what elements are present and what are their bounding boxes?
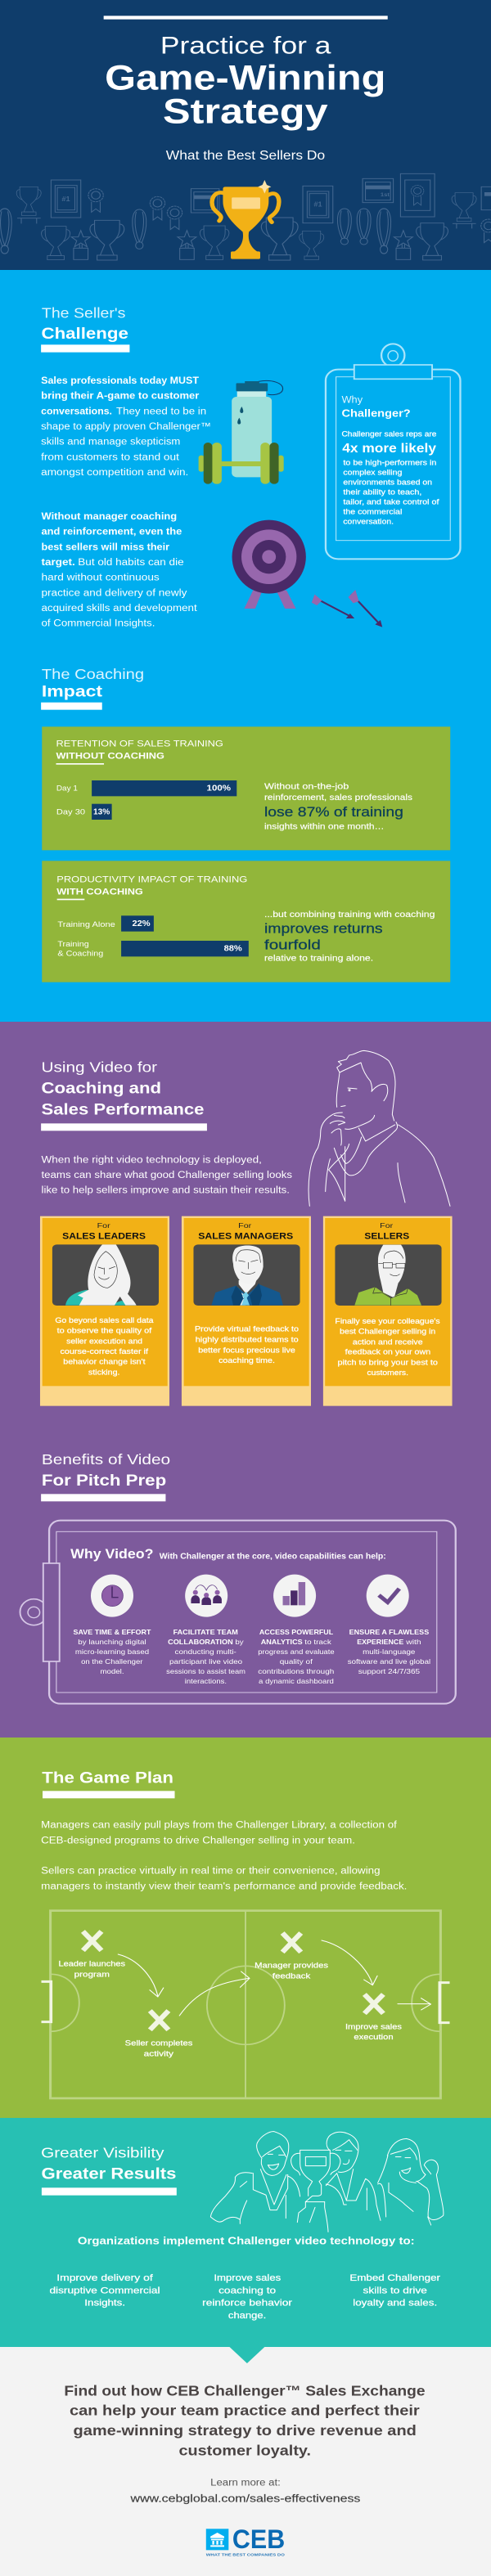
text block: missing the target paragraph: acquired skills and development	[42, 602, 197, 614]
icon: CEB logo: WHAT THE BEST COMPANIES DO	[206, 2553, 285, 2558]
panel: why challenger clipboard: conversation.	[343, 518, 394, 526]
benefit: facilitate team collaboration: participant live video	[169, 1658, 242, 1666]
step: manager provides feedback: Manager provides	[255, 1962, 328, 1970]
title block: Game-Winning	[105, 57, 385, 97]
text block: game plan description: Managers can easily pull plays from the Challenger Library, a collection of	[41, 1819, 397, 1830]
icon: portrait of seller	[354, 1245, 421, 1306]
bar chart: retention: Day 30	[56, 808, 86, 816]
panel: productivity with coaching: WITH COACHING	[56, 886, 143, 897]
step: leader launches program	[59, 1931, 125, 1979]
bar chart: productivity: Training	[57, 941, 89, 949]
panel: retention without coaching	[42, 726, 450, 850]
text block: A-game paragraph: skills and manage skepticism	[41, 436, 180, 447]
heading: Using Video for Coaching and Sales Performance: Coaching and	[42, 1080, 161, 1097]
step: improve sales execution	[345, 1994, 402, 2042]
text block: A-game paragraph: conversations.	[41, 405, 112, 416]
panel: for sales leaders: Go beyond sales call data	[55, 1317, 154, 1325]
panel: for sellers: For	[380, 1222, 393, 1230]
benefit: save time and effort: SAVE TIME & EFFORT	[74, 1629, 151, 1636]
text block: missing the target paragraph	[42, 510, 197, 628]
panel: why challenger clipboard: complex selling	[343, 469, 402, 477]
text block: A-game paragraph: from customers to stand out	[41, 451, 179, 462]
panel: for sales leaders: sticking.	[88, 1369, 120, 1377]
heading: The Seller's Challenge	[41, 305, 129, 353]
panel: for sellers	[323, 1216, 453, 1406]
benefit: ensure a flawless experience: with	[405, 1639, 421, 1646]
text block: video intro: like to help sellers improve and sustain their results.	[42, 1185, 290, 1195]
icon: CEB logo: CEB	[232, 2525, 285, 2554]
panel: retention without coaching: RETENTION OF SALES TRAINING	[56, 738, 223, 749]
panel: for sales managers: SALES MANAGERS	[198, 1230, 293, 1241]
heading: Greater Visibility Greater Results: Greater Results	[42, 2165, 176, 2183]
benefit: facilitate team collaboration: sessions to assist team	[166, 1668, 246, 1675]
benefit: access powerful analytics: to track	[304, 1639, 331, 1646]
panel: seller's challenge and coaching impact	[0, 270, 491, 1022]
text block: learn more link: www.cebglobal.com/sales-effectiveness	[129, 2493, 361, 2504]
step: improve sales execution: Improve sales	[345, 2023, 402, 2031]
step: seller completes activity: activity	[144, 2050, 173, 2058]
panel: header	[0, 0, 491, 270]
benefit: ensure a flawless experience: ENSURE A FLAWLESS	[349, 1629, 429, 1636]
text block: game plan description: CEB-designed programs to drive Challenger selling in your team.	[41, 1835, 355, 1845]
panel: why challenger clipboard: tailor, and take control of	[343, 498, 439, 506]
heading: The Coaching Impact: Impact	[42, 683, 102, 700]
text block: missing the target paragraph: Without manager coaching	[42, 510, 177, 522]
icon: outlined awards row: #1	[61, 196, 70, 203]
callout: lose 87%: lose 87% of training	[264, 804, 403, 820]
text block: call to action	[64, 2383, 426, 2458]
heading: Greater Visibility Greater Results: Greater Visibility	[41, 2145, 164, 2160]
panel: retention without coaching: WITHOUT COACHING	[56, 750, 164, 761]
benefit: ensure a flawless experience	[348, 1575, 430, 1675]
text block: game plan description	[41, 1819, 407, 1891]
benefit: access powerful analytics: ANALYTICS	[261, 1639, 303, 1646]
step: seller completes activity	[125, 2011, 193, 2058]
step: leader launches program: program	[74, 1971, 110, 1979]
text block: embed skills: loyalty and sales.	[353, 2297, 437, 2308]
benefit: save time and effort: on the Challenger	[81, 1658, 142, 1666]
icon: portrait of sales manager	[211, 1246, 283, 1306]
bar chart: productivity	[57, 915, 249, 958]
callout: lose 87%: insights within one month…	[264, 822, 385, 831]
bar chart: retention: 100%	[207, 784, 231, 793]
text block: missing the target paragraph: But old habits can die	[78, 556, 184, 568]
callout: lose 87%: Without on-the-job	[264, 782, 349, 791]
panel: for sales managers: coaching time.	[218, 1357, 275, 1365]
benefit: save time and effort: micro-learning based	[75, 1648, 149, 1656]
text block: missing the target paragraph: best sellers will miss their	[42, 541, 169, 552]
panel: why challenger clipboard: environments based on	[343, 479, 432, 487]
bar chart: retention: Day 1	[56, 784, 78, 793]
text block: improve coaching	[202, 2273, 292, 2321]
text block: improve coaching: coaching to	[218, 2285, 277, 2295]
arrow: to seller	[118, 1954, 164, 1997]
callout: improves returns fourfold: relative to training alone.	[264, 954, 373, 963]
callout: improves returns fourfold: ...but combining training with coaching	[264, 910, 435, 919]
text block: A-game paragraph: They need to be in	[116, 405, 206, 416]
benefit: facilitate team collaboration: interactions.	[185, 1678, 227, 1685]
text block: video intro: teams can share what good Challenger selling looks	[42, 1170, 292, 1180]
panel: for sales leaders: to observe the quality of	[57, 1327, 152, 1335]
panel: for sellers: pitch to bring your best to	[337, 1359, 438, 1367]
text block: missing the target paragraph: of Commercial Insights.	[42, 618, 155, 628]
text block: A-game paragraph	[41, 375, 211, 478]
benefit: save time and effort	[74, 1575, 151, 1675]
panel: why challenger clipboard: 4x more likely	[342, 441, 437, 456]
panel: for sales leaders	[40, 1216, 169, 1406]
title block: Practice for a	[160, 32, 331, 59]
icon: portrait of sales leader	[65, 1244, 137, 1306]
bar chart: retention	[56, 780, 236, 820]
heading: The Game Plan: The Game Plan	[42, 1769, 173, 1787]
heading: Using Video for Coaching and Sales Performance: Sales Performance	[42, 1101, 204, 1118]
title block: Strategy	[163, 92, 328, 131]
text block: missing the target paragraph: hard without continuous	[42, 572, 160, 582]
benefit: facilitate team collaboration: FACILITATE TEAM	[173, 1629, 238, 1636]
title block	[104, 16, 388, 131]
benefit: access powerful analytics: progress and evaluate	[258, 1648, 335, 1656]
heading: Using Video for Coaching and Sales Performance: Using Video for	[42, 1059, 157, 1075]
benefit: facilitate team collaboration: conducting multi-	[175, 1648, 236, 1656]
benefit: save time and effort: model.	[100, 1668, 124, 1675]
panel: for sales managers: highly distributed teams to	[196, 1336, 299, 1344]
heading: Greater Visibility Greater Results	[41, 2145, 177, 2196]
text block: embed skills: skills to drive	[363, 2285, 427, 2295]
benefit: facilitate team collaboration: by	[235, 1639, 244, 1646]
heading: Benefits of Video For Pitch Prep	[41, 1451, 170, 1501]
text block: A-game paragraph: Sales professionals today MUST	[41, 375, 199, 386]
panel: why video tablet	[20, 1521, 456, 1704]
benefit: ensure a flawless experience: EXPERIENCE	[357, 1639, 403, 1646]
panel: for sellers: SELLERS	[364, 1230, 409, 1241]
panel: using video and benefits	[0, 1022, 491, 1738]
icon: outlined awards row	[0, 173, 491, 260]
panel: for sales managers: better focus precious live	[198, 1346, 295, 1355]
text block: call to action: game-winning strategy to drive revenue and	[74, 2422, 417, 2439]
subtitle: What the Best Sellers Do	[166, 149, 325, 163]
text block: learn more link: Learn more at:	[210, 2477, 281, 2488]
icon: outlined awards row: 1st	[381, 191, 390, 198]
text block: call to action: customer loyalty.	[178, 2443, 311, 2458]
panel: why video tablet: With Challenger at the core, video capabilities can help:	[160, 1553, 386, 1561]
heading: Benefits of Video For Pitch Prep: For Pitch Prep	[42, 1472, 166, 1490]
text block: call to action: Find out how CEB Challenger™ Sales Exchange	[64, 2383, 426, 2398]
heading: Benefits of Video For Pitch Prep: Benefits of Video	[42, 1451, 170, 1468]
text block: game plan description: Sellers can practice virtually in real time or their convenience, allowing	[41, 1865, 381, 1876]
panel: why challenger clipboard: their ability to teach,	[343, 488, 421, 497]
panel: for sales managers	[182, 1216, 311, 1406]
text block: improve delivery: Improve delivery of	[56, 2273, 154, 2283]
text block: embed skills: Embed Challenger	[349, 2273, 440, 2283]
text block: A-game paragraph: bring their A-game to customer	[41, 390, 199, 401]
text block: missing the target paragraph: practice and delivery of newly	[42, 587, 187, 598]
benefit: facilitate team collaboration: COLLABORATION	[168, 1639, 233, 1646]
icon: outlined awards row: #1	[313, 200, 322, 209]
bar chart: retention: 13%	[93, 807, 110, 816]
text block: learn more link	[129, 2477, 361, 2504]
arrow: to goal	[398, 1998, 431, 2010]
icon: CEB logo	[206, 2525, 285, 2558]
step: manager provides feedback	[255, 1933, 328, 1980]
text block: improve delivery: Insights.	[84, 2297, 125, 2308]
benefit: access powerful analytics: contributions through	[258, 1668, 334, 1675]
heading: The Game Plan	[42, 1769, 175, 1798]
text block: video intro: When the right video technology is deployed,	[42, 1154, 262, 1165]
step: seller completes activity: Seller completes	[125, 2039, 193, 2048]
panel: call to action footer	[0, 2347, 491, 2576]
heading: The Coaching Impact	[41, 666, 144, 710]
text block: missing the target paragraph: target.	[42, 556, 75, 568]
panel: why challenger clipboard: to be high-performers in	[343, 459, 436, 467]
panel: why challenger clipboard	[326, 344, 460, 559]
benefit: ensure a flawless experience: support 24/7/365	[358, 1668, 420, 1675]
panel: why video tablet: Why Video?	[70, 1546, 153, 1562]
panel: for sellers: Finally see your colleague's	[335, 1318, 440, 1326]
step: improve sales execution: execution	[354, 2034, 394, 2042]
panel: the game plan	[0, 1738, 491, 2118]
panel: for sales leaders: SALES LEADERS	[62, 1230, 146, 1241]
callout: lose 87%: reinforcement, sales professionals	[264, 793, 412, 802]
icon: gold trophy	[212, 180, 279, 259]
icon: thinking man line drawing	[309, 1050, 450, 1206]
benefit: save time and effort: by launching digital	[78, 1639, 146, 1646]
panel: productivity with coaching	[42, 861, 450, 982]
chart: playing field diagram	[42, 1911, 449, 2098]
panel: for sales leaders: seller execution and	[66, 1337, 142, 1346]
benefit: ensure a flawless experience: software and live global	[348, 1658, 430, 1666]
panel: greater visibility greater results	[0, 2118, 491, 2347]
text block: embed skills	[349, 2273, 440, 2308]
icon: celebrating team with trophy	[210, 2132, 444, 2232]
step: manager provides feedback: feedback	[273, 1972, 310, 1980]
text block: A-game paragraph: amongst competition and win.	[41, 466, 188, 478]
callout: lose 87%	[264, 782, 412, 831]
bar chart: productivity: 22%	[132, 919, 151, 928]
text block: improve coaching: change.	[228, 2310, 266, 2321]
text block: organizations implement: Organizations implement Challenger video technology to:	[78, 2235, 415, 2246]
text block: missing the target paragraph: and reinforcement, even the	[42, 526, 182, 537]
bar chart: productivity: & Coaching	[57, 950, 103, 958]
benefit: facilitate team collaboration	[166, 1575, 246, 1685]
panel: for sellers: customers.	[367, 1369, 408, 1378]
text block: video intro	[42, 1154, 292, 1195]
panel: for sellers: feedback on your own	[345, 1348, 430, 1356]
benefit: access powerful analytics	[258, 1575, 335, 1685]
text block: game plan description: managers to instantly view their team's performance and provide feedback.	[41, 1881, 407, 1891]
text block: improve coaching: reinforce behavior	[202, 2297, 292, 2308]
panel: for sales managers: For	[238, 1222, 251, 1230]
text block: improve delivery	[49, 2273, 160, 2308]
arrow: section pointer	[229, 2347, 264, 2363]
panel: for sales leaders: For	[97, 1222, 110, 1230]
heading: The Coaching Impact: The Coaching	[42, 666, 144, 682]
text block: improve coaching: Improve sales	[214, 2273, 281, 2283]
heading: The Seller's Challenge: The Seller's	[42, 305, 125, 321]
callout: improves returns fourfold: improves returns	[264, 921, 383, 936]
panel: why challenger clipboard: Why	[341, 394, 363, 405]
panel: productivity with coaching: PRODUCTIVITY IMPACT OF TRAINING	[56, 874, 247, 884]
text block: A-game paragraph: shape to apply proven Challenger™	[41, 420, 211, 432]
arrow: to manager	[179, 1971, 250, 2016]
text block: improve delivery: disruptive Commercial	[49, 2285, 160, 2295]
panel: why challenger clipboard: Challenger?	[341, 408, 411, 420]
panel: why challenger clipboard: the commercial	[343, 508, 402, 516]
benefit: access powerful analytics: a dynamic dashboard	[259, 1678, 334, 1685]
panel: for sales leaders: behavior change isn't	[63, 1358, 146, 1366]
text block: call to action: can help your team practice and perfect their	[70, 2403, 420, 2418]
panel: for sellers: action and receive	[353, 1338, 423, 1346]
bar chart: productivity: 88%	[224, 944, 242, 953]
panel: for sales leaders: course-correct faster if	[60, 1348, 148, 1356]
callout: improves returns fourfold: fourfold	[264, 937, 321, 952]
icon: target with missed arrows	[232, 520, 382, 627]
arrow: to execution	[322, 1940, 377, 1985]
bar chart: productivity: Training Alone	[57, 921, 115, 929]
benefit: access powerful analytics: quality of	[280, 1658, 313, 1666]
heading: The Seller's Challenge: Challenge	[42, 325, 128, 343]
benefit: access powerful analytics: ACCESS POWERFUL	[259, 1629, 333, 1636]
benefit: ensure a flawless experience: multi-language	[363, 1648, 415, 1656]
panel: for sellers: best Challenger selling in	[340, 1328, 435, 1336]
step: leader launches program: Leader launches	[59, 1960, 125, 1968]
icon: water bottle and dumbbell	[199, 380, 284, 484]
panel: for sales managers: Provide virtual feedback to	[195, 1325, 299, 1333]
heading: Using Video for Coaching and Sales Performance	[41, 1059, 207, 1131]
panel: why challenger clipboard: Challenger sales reps are	[341, 430, 436, 438]
callout: improves returns fourfold	[264, 910, 435, 963]
